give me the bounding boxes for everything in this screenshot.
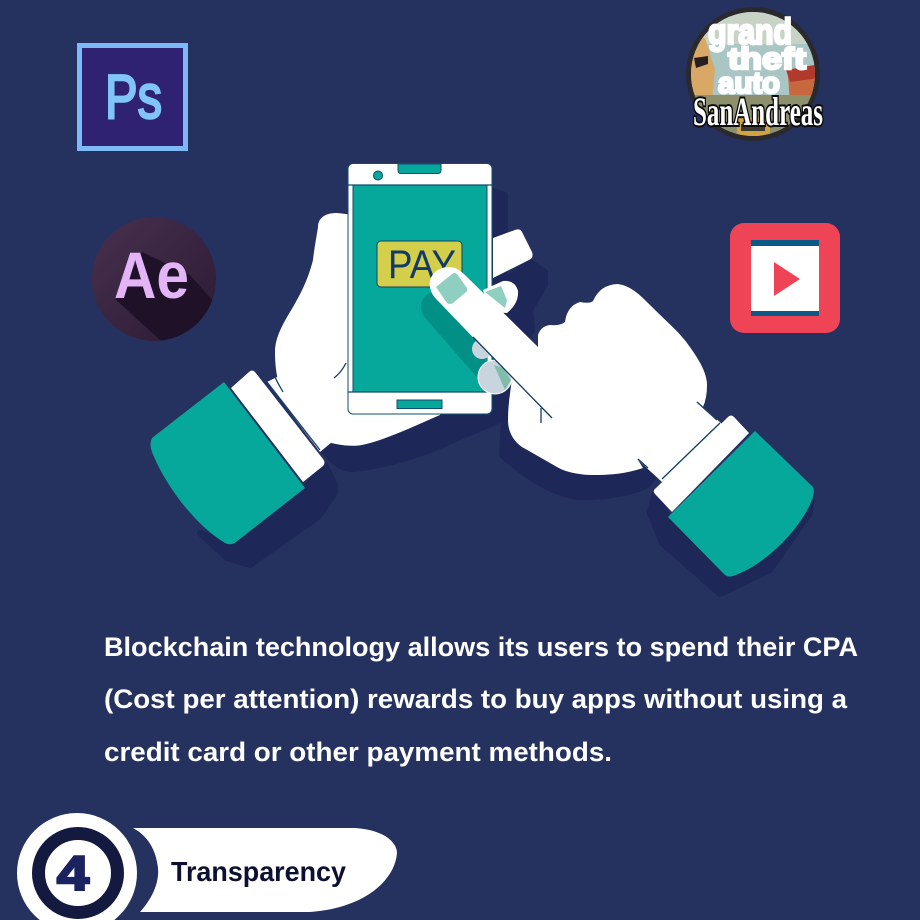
label pill: Transparency xyxy=(133,828,397,912)
pay button: PAY xyxy=(388,243,456,287)
middle finger with nail xyxy=(483,281,518,313)
icon: GTA San Andreas badge: SanAndreas xyxy=(693,89,823,134)
icon: GTA San Andreas badge: auto xyxy=(718,67,780,100)
phone xyxy=(348,164,492,414)
body text: credit card or other payment methods. xyxy=(104,737,612,767)
icon: GTA San Andreas badge: theft xyxy=(728,41,806,76)
background shadows xyxy=(200,190,812,594)
lower fingers xyxy=(472,339,512,394)
icon: Photoshop: Ps xyxy=(105,63,162,132)
body text: (Cost per attention) rewards to buy apps without using a xyxy=(104,684,848,714)
icon: GTA San Andreas badge xyxy=(686,7,823,141)
icon: GTA San Andreas badge: grand xyxy=(708,11,792,52)
left cuff teal xyxy=(150,382,305,544)
step badge: number 4: 4 xyxy=(57,848,89,901)
right hand with index finger xyxy=(430,267,722,482)
step badge: number 4 xyxy=(17,813,137,920)
illustration: hands paying on phone xyxy=(150,164,814,594)
icon: After Effects xyxy=(92,217,216,341)
back fingers xyxy=(493,229,533,278)
icon: Photoshop xyxy=(80,46,186,148)
body text: Blockchain technology allows its users to spend their CPA xyxy=(104,632,858,662)
icon: After Effects: Ae xyxy=(114,238,189,312)
left hand xyxy=(275,213,470,446)
body text xyxy=(104,632,858,767)
finger and wrist lines xyxy=(267,337,720,479)
finger shadow on screen xyxy=(437,307,490,368)
icon: video play xyxy=(730,223,840,333)
right cuff teal xyxy=(668,431,814,577)
left wrist xyxy=(267,377,332,452)
index nail xyxy=(436,273,467,304)
left cuff white xyxy=(231,370,324,482)
right cuff white xyxy=(654,416,749,512)
label pill: Transparency: Transparency xyxy=(171,856,346,887)
